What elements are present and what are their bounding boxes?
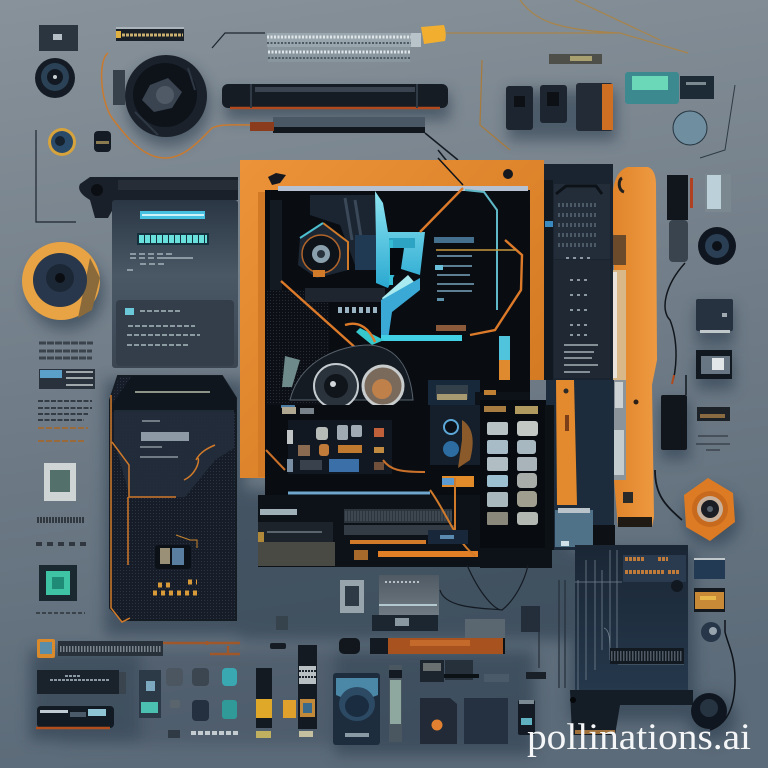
cooler bbox=[298, 223, 348, 278]
dark device bbox=[36, 706, 114, 728]
lighter upper panel bbox=[114, 410, 234, 497]
black tube bar bbox=[222, 84, 448, 108]
glass display panel bbox=[112, 200, 238, 368]
screws bbox=[268, 173, 286, 185]
wires bbox=[440, 565, 528, 610]
long ram bar bbox=[58, 641, 163, 656]
bottom cards block bbox=[258, 478, 552, 568]
cyan outline bbox=[465, 190, 497, 310]
screw bbox=[671, 580, 683, 592]
lower panel bbox=[546, 380, 614, 550]
small blue module bbox=[39, 369, 95, 389]
small strip bbox=[549, 54, 602, 64]
watermark: pollinations.ai bbox=[527, 717, 751, 758]
thin wire bbox=[36, 33, 480, 222]
orange wire bbox=[102, 53, 250, 158]
memory slots bbox=[305, 288, 385, 302]
tall yellow stick bbox=[256, 668, 272, 738]
dark connectors bbox=[506, 86, 533, 130]
silver chip bbox=[44, 463, 76, 501]
copper label bbox=[436, 325, 466, 331]
interior bbox=[265, 190, 530, 405]
orange strip bbox=[556, 380, 577, 505]
bottom center parts bbox=[333, 565, 546, 745]
small connector bbox=[94, 131, 111, 152]
blue capacitors bbox=[430, 405, 480, 468]
icon: orange wheel bbox=[22, 242, 100, 320]
knob and wire bbox=[701, 620, 735, 730]
dark fan behind cooler bbox=[310, 195, 380, 265]
grey unit bbox=[372, 575, 439, 631]
wires bbox=[480, 60, 510, 150]
cyan light bbox=[140, 211, 205, 219]
silver tag bbox=[705, 174, 731, 212]
screw two bbox=[503, 169, 513, 179]
keycaps bbox=[166, 668, 240, 738]
icon: camera lens bbox=[35, 58, 75, 98]
orange lines bbox=[111, 395, 215, 622]
glass disc bbox=[673, 85, 735, 158]
block with orange dot bbox=[420, 698, 457, 744]
orange computer case bbox=[240, 158, 544, 478]
grey block bbox=[465, 619, 505, 638]
keys block bbox=[480, 400, 546, 550]
inner orange rim bbox=[258, 192, 265, 477]
badge bbox=[155, 545, 191, 569]
pcie slots bbox=[344, 509, 452, 523]
left case panel bbox=[79, 177, 238, 368]
top handle bar bbox=[79, 177, 238, 218]
hose connector bbox=[667, 175, 693, 262]
memory chip bbox=[116, 27, 184, 41]
blue tab bbox=[555, 510, 593, 547]
black wires bbox=[438, 158, 463, 185]
lower board block bbox=[240, 405, 555, 495]
top right label bbox=[623, 555, 686, 582]
grid lines bbox=[575, 550, 684, 690]
orange lines bbox=[163, 641, 240, 654]
spec lines bbox=[39, 343, 93, 358]
key rows bbox=[487, 421, 538, 525]
label bbox=[260, 509, 297, 515]
dark square with rod bbox=[521, 606, 546, 679]
top dark trim bbox=[112, 376, 236, 412]
icon: orange gear bbox=[684, 478, 735, 541]
lower dark screen bbox=[116, 300, 234, 366]
cyan tube bbox=[375, 191, 425, 288]
black card bbox=[258, 522, 333, 542]
silver heat tube bbox=[267, 0, 688, 62]
vrm blue board bbox=[428, 380, 480, 405]
yellow cap bbox=[421, 25, 446, 44]
orange cables bbox=[281, 188, 522, 350]
cyan label bbox=[137, 233, 209, 245]
small glyph dashes bbox=[127, 254, 195, 270]
orange connector bbox=[37, 639, 55, 658]
icon: large fan bbox=[113, 55, 207, 137]
cyan orange pill bbox=[499, 336, 510, 360]
right small parts bbox=[655, 174, 736, 520]
dark label plate bbox=[37, 670, 126, 694]
left small parts bbox=[36, 343, 95, 613]
black wire to gear bbox=[655, 470, 682, 520]
black pad bbox=[661, 263, 687, 450]
bottom left parts bbox=[36, 616, 317, 738]
case frame bbox=[240, 160, 544, 478]
small device bbox=[518, 700, 535, 735]
small chip bbox=[697, 407, 730, 421]
left hatch bbox=[282, 356, 300, 387]
bottom right dark board bbox=[559, 545, 735, 735]
rod tool bbox=[420, 660, 509, 682]
left strip bbox=[270, 200, 282, 290]
label bbox=[141, 432, 189, 441]
orange cable and cyan rail bbox=[266, 450, 425, 472]
small plug bbox=[270, 616, 288, 649]
orange module bbox=[694, 588, 725, 612]
small dark box bbox=[39, 25, 78, 51]
black mesh case panel bbox=[110, 376, 236, 622]
wheel bbox=[691, 693, 727, 729]
grey card bbox=[258, 542, 335, 566]
connector slot bbox=[610, 648, 684, 664]
tall card with barcode bbox=[298, 645, 317, 737]
orange bars bbox=[350, 540, 426, 544]
yellow block bbox=[283, 700, 296, 718]
icon: twin fans bbox=[290, 345, 413, 408]
silver chip bbox=[340, 580, 364, 613]
box one bbox=[696, 299, 733, 333]
icon: lens bbox=[698, 227, 736, 265]
top right parts bbox=[480, 54, 735, 158]
connector three bbox=[576, 83, 613, 131]
small components bbox=[281, 405, 392, 474]
usb stick bbox=[389, 665, 402, 742]
top left parts bbox=[35, 25, 480, 222]
camera bbox=[333, 673, 380, 745]
orange bar bbox=[339, 638, 505, 654]
RAM strip bbox=[37, 517, 85, 523]
gold dots bbox=[153, 582, 198, 593]
mesh bbox=[267, 290, 329, 405]
tall blue card bbox=[139, 670, 161, 718]
dark cable bar bbox=[250, 117, 466, 185]
connector two bbox=[540, 85, 567, 123]
teal chip bbox=[39, 565, 77, 601]
gold tab bbox=[258, 532, 264, 542]
spec text bbox=[38, 401, 92, 420]
base bbox=[570, 690, 693, 735]
right dark panel bbox=[544, 164, 615, 550]
tall thin edges bbox=[559, 580, 565, 688]
orange curved cable bbox=[430, 478, 475, 556]
dark block bbox=[464, 698, 508, 744]
teal module bbox=[625, 72, 714, 104]
icon: ring bbox=[48, 128, 76, 156]
display text bbox=[434, 237, 516, 301]
blue panel bbox=[694, 558, 725, 579]
box two bbox=[696, 350, 732, 379]
yellow wire bbox=[446, 0, 688, 53]
orange side panel bbox=[613, 167, 657, 527]
